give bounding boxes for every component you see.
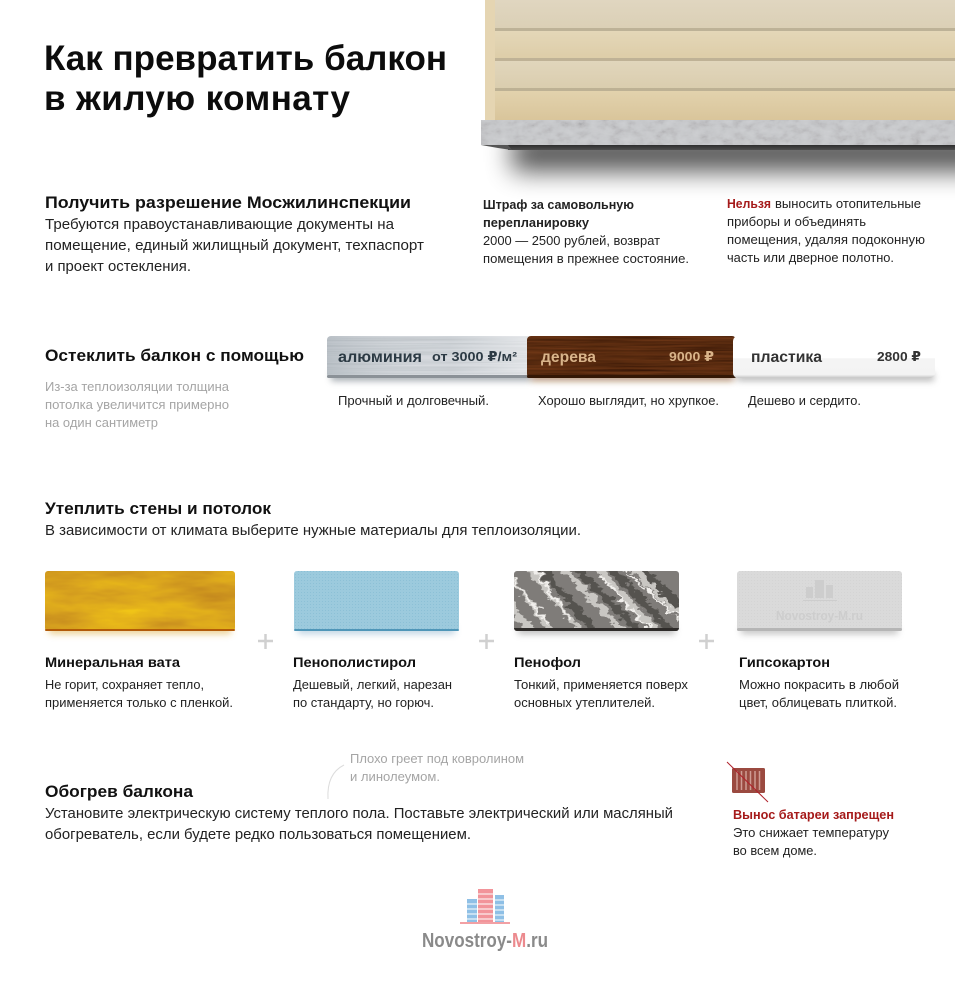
title: Как превратить балкон [44,39,447,78]
bar: plastic [733,336,935,381]
material: foil foam: Тонкий, применяется поверх [514,677,688,692]
text: prohibition: Нельзя [727,196,771,211]
captions: glazing: Прочный и долговечный. [338,393,489,408]
icon: crossed-out radiator [727,762,768,802]
heading: insulation: Утеплить стены и потолок [45,499,271,518]
wordmark: Novostroy-M.ru [422,930,548,952]
material: mineral wool: применяется только с пленкой. [45,695,233,710]
text: fine: 2000 — 2500 рублей, возврат [483,233,660,248]
heading: permit: Получить разрешение Мосжилинспекции [45,193,411,212]
plus [258,634,273,649]
material: drywall [737,571,902,710]
material: drywall: Novostroy-M.ru [776,608,863,623]
material: foil foam [514,571,688,710]
bar: wood: дерева [541,349,596,366]
heading: glazing: Остеклить балкон с помощью [45,346,304,365]
text: heating advice: Установите электрическую систему теплого пола. Поставьте электрический или масляный [45,806,673,822]
note: floor heating [328,751,524,799]
callout: radiator ban: во всем доме. [733,843,817,858]
balcony wall illustration [481,0,955,171]
material: polystyrene: Пенополистирол [293,654,416,670]
note: floor heating: и линолеумом. [350,769,440,784]
note: insulation thickness: на один сантиметр [45,415,158,430]
wall corner trim [485,0,495,120]
heading: heating: Обогрев балкона [45,782,194,801]
plus [479,634,494,649]
material: polystyrene: Дешевый, легкий, нарезан [293,677,452,692]
text: heating advice [45,806,673,843]
material: mineral wool: Не горит, сохраняет тепло, [45,677,204,692]
text: prohibition [727,196,925,265]
material: foil foam: Пенофол [514,654,581,670]
title [44,39,447,118]
callout: radiator ban [733,807,894,858]
material: drywall: Гипсокартон [739,654,830,670]
text: fine: Штраф за самовольную [483,197,634,212]
bar: aluminium: от 3000 ₽/м² [432,349,518,364]
bar: wood: 9000 ₽ [669,349,714,364]
text: permit documents: Требуются правоустанавливающие документы на [45,217,395,233]
icon: buildings [460,889,510,924]
text: prohibition: выносить отопительные [775,196,921,211]
concrete slab [481,120,955,150]
material: mineral wool: Минеральная вата [45,654,180,670]
note: insulation thickness [45,379,230,430]
text: prohibition: помещения, удаляя подоконную [727,232,925,247]
text: permit documents: помещение, единый жилищный документ, техпаспорт [45,238,424,254]
section: insulation [45,499,902,710]
bar: aluminium [327,336,532,381]
text: permit documents: и проект остекления. [45,259,191,275]
callout: radiator ban: Это снижает температуру [733,825,889,840]
text: fine: перепланировку [483,215,590,230]
material: drywall: Можно покрасить в любой [739,677,899,692]
text: heating advice: обогреватель, если будете редко пользоваться помещением. [45,827,471,843]
section: permit [45,193,925,275]
section: glazing [45,336,935,430]
captions: glazing [338,393,861,408]
bar: plastic: пластика [751,349,822,366]
text: fine [483,197,689,266]
text: prohibition: часть или дверное полотно. [727,250,894,265]
bar: wood [527,336,736,381]
text: prohibition: приборы и объединять [727,214,866,229]
material: drywall: цвет, облицевать плиткой. [739,695,897,710]
callout: radiator ban: Вынос батареи запрещен [733,807,894,822]
bar: plastic: 2800 ₽ [877,349,921,364]
captions: glazing: Хорошо выглядит, но хрупкое. [538,393,719,408]
note: insulation thickness: Из-за теплоизоляции толщина [45,379,230,394]
note: floor heating: Плохо греет под ковролином [350,751,524,766]
slab shadow [512,135,955,171]
material: polystyrene [293,571,459,710]
siding panels [495,0,955,120]
section: heating [45,751,894,858]
material: polystyrene: по стандарту, но горюч. [293,695,434,710]
plus [699,634,714,649]
logo [422,889,548,952]
text: insulation intro: В зависимости от климата выберите нужные материалы для теплоизоляции. [45,523,581,539]
captions: glazing: Дешево и сердито. [748,393,861,408]
text: permit documents [45,217,424,275]
title: в жилую комнату [44,79,351,118]
text: fine: помещения в прежнее состояние. [483,251,689,266]
bar: aluminium: алюминия [338,349,422,366]
note: insulation thickness: потолка увеличится примерно [45,397,229,412]
material: mineral wool [45,571,235,710]
material: foil foam: основных утеплителей. [514,695,655,710]
